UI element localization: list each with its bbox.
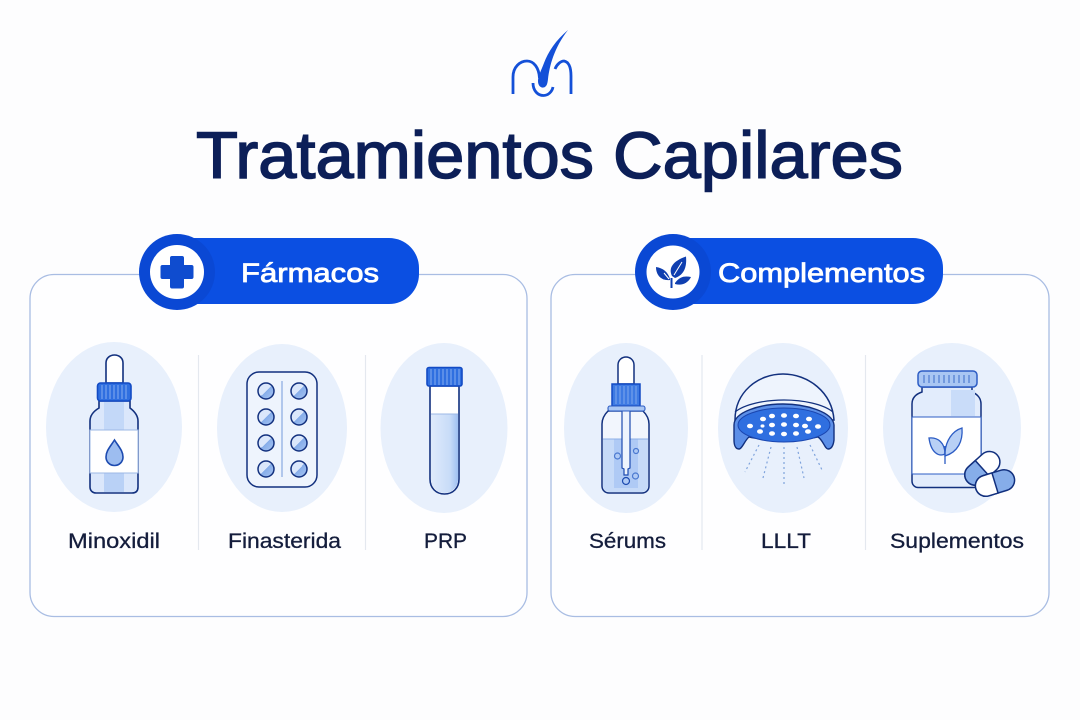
label: Finasterida: Finasterida	[228, 530, 341, 553]
logo: hair follicle	[513, 30, 571, 96]
icon: leaves	[656, 256, 691, 288]
item: Minoxidil	[46, 342, 182, 553]
item: LLLT	[718, 343, 848, 553]
capsule two	[973, 467, 1017, 499]
icon: dropper bottle	[90, 355, 138, 493]
icon: laser helmet	[734, 374, 834, 484]
icon: blister pack	[247, 372, 317, 487]
icon: test tube	[427, 368, 462, 494]
jar leaf emblem	[929, 428, 962, 464]
label: Suplementos: Suplementos	[890, 530, 1024, 553]
label: Sérums: Sérums	[589, 530, 666, 553]
item: Finasterida	[217, 344, 347, 553]
title: Tratamientos Capilares	[196, 118, 903, 192]
item dividers	[702, 355, 866, 550]
item dividers	[198, 355, 366, 550]
item: Suplementos	[883, 343, 1024, 553]
icon: supplement jar with capsules	[912, 371, 1017, 499]
label: Minoxidil: Minoxidil	[68, 530, 160, 553]
label: LLLT: LLLT	[761, 530, 811, 553]
heading pill: Fármacos	[139, 234, 419, 310]
capsule one	[960, 447, 1004, 490]
heading text: Complementos: Complementos	[718, 258, 925, 288]
heading pill: Complementos	[635, 234, 943, 310]
panel: Complementos	[551, 234, 1049, 616]
label: PRP: PRP	[424, 530, 467, 553]
panel: Fármacos	[30, 234, 527, 616]
icon: medical cross	[160, 256, 194, 288]
item: PRP	[380, 343, 508, 553]
heading text: Fármacos: Fármacos	[241, 258, 379, 288]
item: Sérums	[564, 343, 688, 553]
icon: serum dropper bottle	[602, 357, 649, 493]
